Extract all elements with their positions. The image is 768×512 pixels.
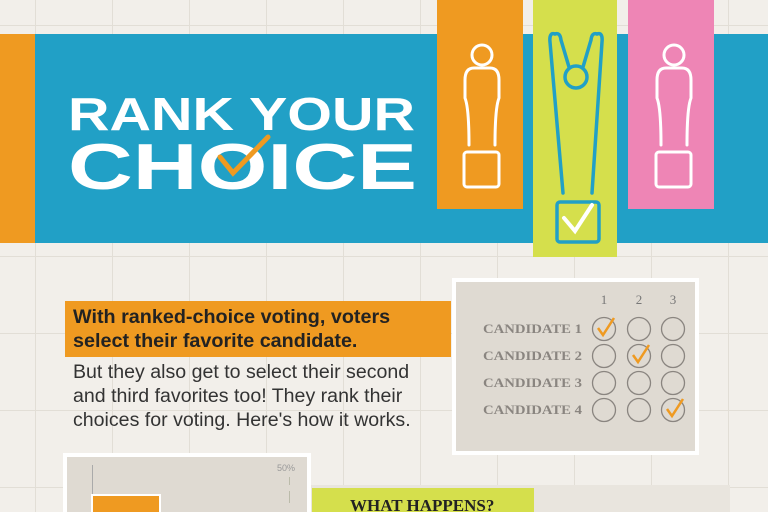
title: RANK YOUR [68,88,415,140]
orange bar [91,494,161,512]
what happens box [312,488,534,512]
ballot card: CANDIDATE 2 [483,349,582,363]
body text: choices for voting. Here's how it works. [73,410,411,431]
checkmark in O [220,137,268,173]
intro heading box: select their favorite candidate. [73,331,357,352]
intro heading box: With ranked-choice voting, voters [73,307,390,328]
body text [73,362,411,431]
chart box: 50% [277,463,295,473]
orange side strip [0,34,35,243]
ballot card: 1 [601,292,607,307]
body text: and third favorites too! They rank their [73,386,402,407]
title: CHOICE [68,130,417,203]
chart box [63,453,311,512]
ballot card [452,278,699,455]
ballot card: 2 [636,292,642,307]
ballot card: 3 [670,292,676,307]
column: orange candidate [437,0,523,209]
intro heading box [65,301,451,357]
ballot card: CANDIDATE 3 [483,376,582,390]
title [68,88,417,203]
ballot card: CANDIDATE 4 [483,403,583,417]
gray band [311,485,730,512]
column: pink candidate [628,0,714,209]
column: green winner [533,0,617,257]
candidate columns with icons [437,0,714,257]
body text: But they also get to select their second [73,362,409,383]
ballot card: CANDIDATE 1 [483,322,582,336]
banner [0,34,768,243]
